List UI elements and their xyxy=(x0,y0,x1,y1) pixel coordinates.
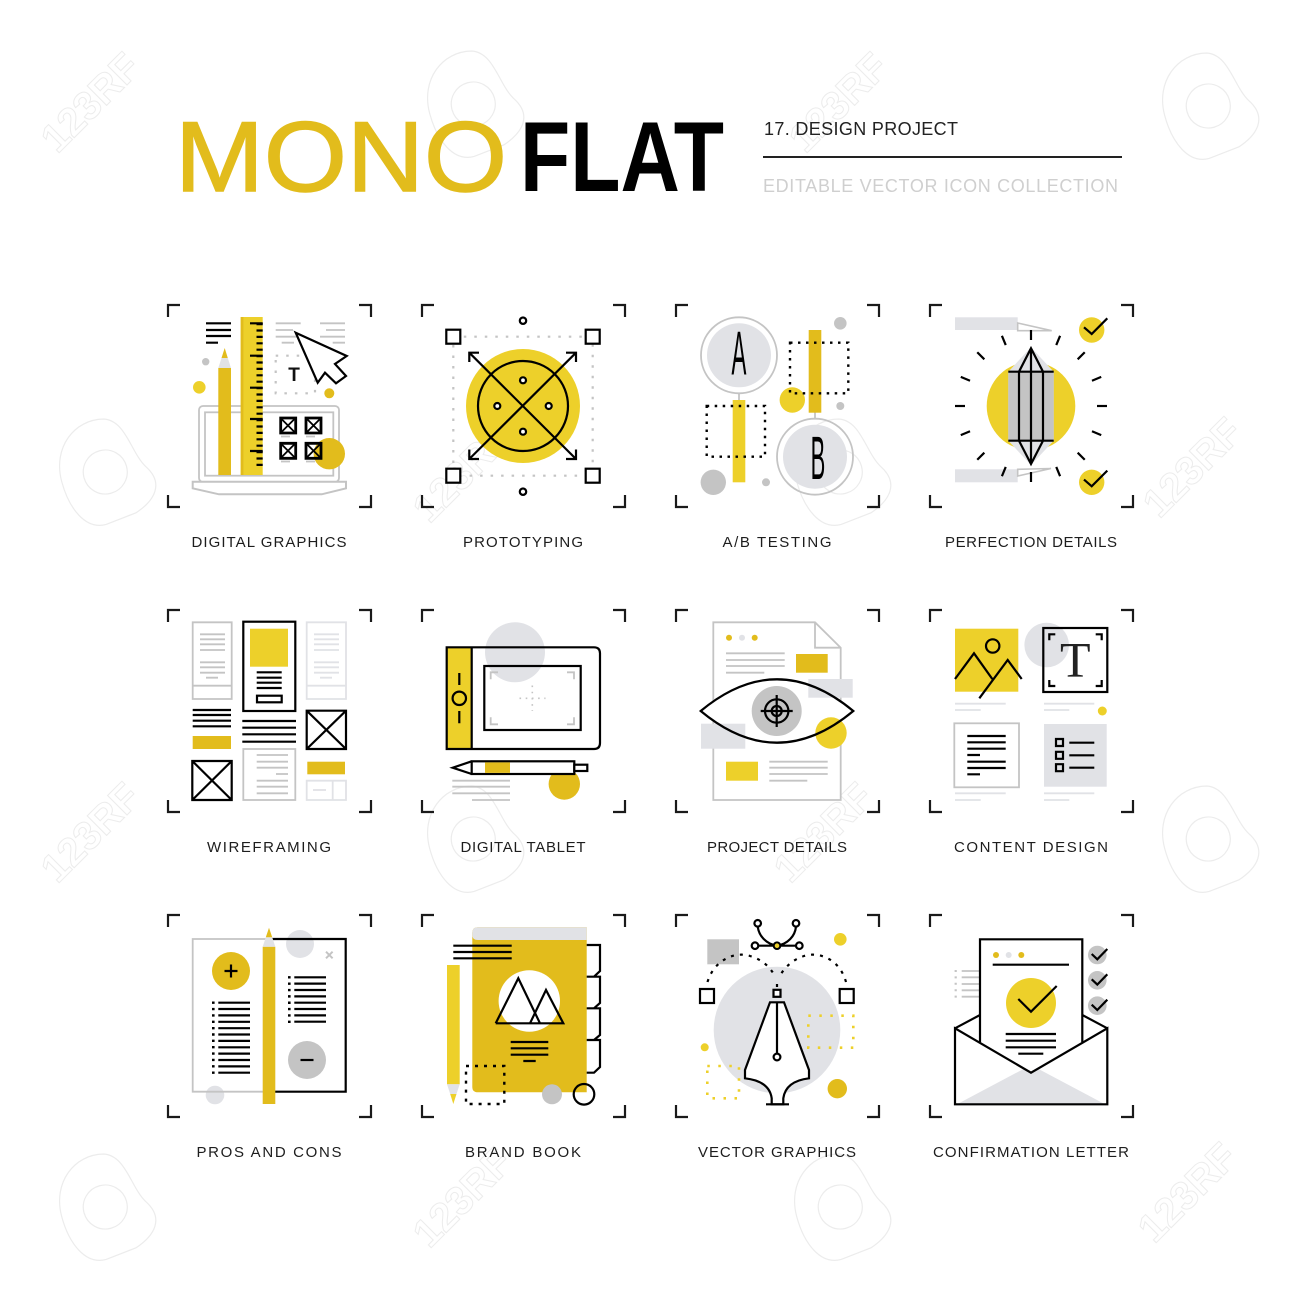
cursor xyxy=(296,333,347,383)
watermark pattern: 123RF xyxy=(1130,1135,1246,1251)
labels row 3 xyxy=(196,1144,1129,1161)
panel: brand book xyxy=(422,915,625,1117)
cons badge xyxy=(288,1041,326,1079)
stylus xyxy=(453,761,587,774)
pros badge xyxy=(212,952,250,990)
pen nib xyxy=(745,1002,809,1104)
image card xyxy=(955,629,1022,698)
image placeholders xyxy=(281,418,321,462)
tablet buttons xyxy=(453,673,466,723)
image placeholder left xyxy=(192,761,232,800)
crystal xyxy=(1008,348,1054,464)
check badges xyxy=(1079,317,1107,495)
letter xyxy=(980,939,1082,1073)
labels row 3: CONFIRMATION LETTER xyxy=(933,1144,1129,1161)
pencil xyxy=(218,348,231,475)
title: MONO: MONO xyxy=(175,101,507,212)
panel: vector graphics xyxy=(676,915,879,1117)
letter T: T xyxy=(288,365,300,386)
circle A: A xyxy=(732,319,746,388)
labels row 2 xyxy=(207,839,1108,856)
labels row 1: PERFECTION DETAILS xyxy=(945,534,1117,551)
envelope pocket xyxy=(957,1065,1105,1104)
header xyxy=(175,101,1122,212)
watermark pattern: 123RF xyxy=(33,45,149,161)
panel: project details xyxy=(676,610,879,812)
target xyxy=(761,695,793,727)
check column xyxy=(1088,946,1107,1015)
eye xyxy=(701,679,853,749)
watermark pattern: 123RF xyxy=(1135,410,1251,526)
circle B xyxy=(777,419,853,495)
control dots xyxy=(494,377,552,435)
panel: a/b testing xyxy=(676,305,879,507)
panel: digital graphics xyxy=(168,305,371,507)
light page xyxy=(307,622,346,699)
panel: pros and cons xyxy=(168,915,371,1117)
labels row 1 xyxy=(192,534,1117,551)
book xyxy=(472,927,587,1092)
panel: digital tablet xyxy=(422,610,625,812)
text card: T xyxy=(1060,632,1091,688)
labels row 1: A/B TESTING xyxy=(722,534,832,551)
black page xyxy=(243,622,295,711)
title: FLAT: FLAT xyxy=(520,101,724,212)
bezier handle xyxy=(752,920,803,949)
labels row 2: CONTENT DESIGN xyxy=(954,839,1108,856)
pros list xyxy=(213,1002,250,1074)
text document xyxy=(954,723,1019,787)
gray page xyxy=(193,622,232,699)
light rays xyxy=(955,330,1107,482)
checklist card xyxy=(1044,724,1107,787)
cons list xyxy=(289,976,326,1023)
watermark pattern: 123RF xyxy=(766,775,882,891)
panel: confirmation letter xyxy=(930,915,1133,1117)
subtitle: 17. DESIGN PROJECT xyxy=(764,119,958,139)
tablet body xyxy=(447,647,600,749)
pencil xyxy=(263,928,275,1104)
circle B: B xyxy=(811,424,825,492)
tagline: EDITABLE VECTOR ICON COLLECTION xyxy=(763,176,1118,196)
panel: content design xyxy=(930,610,1133,812)
watermark pattern: 123RF xyxy=(781,45,897,161)
document xyxy=(713,622,841,800)
dashed paths xyxy=(708,955,846,988)
labels row 1: DIGITAL GRAPHICS xyxy=(192,534,346,551)
selection handles xyxy=(446,318,600,495)
labels row 3: PROS AND CONS xyxy=(196,1144,342,1161)
expanding arrows xyxy=(469,353,576,459)
text card xyxy=(1043,628,1107,692)
gray text page xyxy=(243,749,295,800)
sheet xyxy=(193,939,346,1092)
laptop xyxy=(193,406,346,494)
panel: prototyping xyxy=(422,305,625,507)
labels row 2: WIREFRAMING xyxy=(207,839,331,856)
pencil xyxy=(447,965,460,1104)
index tabs xyxy=(587,945,600,1073)
side list xyxy=(956,970,993,998)
image placeholder right xyxy=(307,711,346,749)
panel: wireframing xyxy=(168,610,371,812)
labels row 2: PROJECT DETAILS xyxy=(707,839,847,856)
envelope xyxy=(955,1015,1107,1104)
watermark pattern: 123RF xyxy=(405,1140,521,1256)
ruler xyxy=(241,317,263,475)
circle A xyxy=(701,317,777,393)
labels row 2: DIGITAL TABLET xyxy=(460,839,586,856)
labels row 1: PROTOTYPING xyxy=(463,534,583,551)
labels row 3: VECTOR GRAPHICS xyxy=(698,1144,856,1161)
watermark pattern: 123RF xyxy=(33,775,149,891)
labels row 3: BRAND BOOK xyxy=(465,1144,581,1161)
watermark pattern: 123RF xyxy=(405,415,521,531)
panel: perfection details xyxy=(930,305,1133,507)
